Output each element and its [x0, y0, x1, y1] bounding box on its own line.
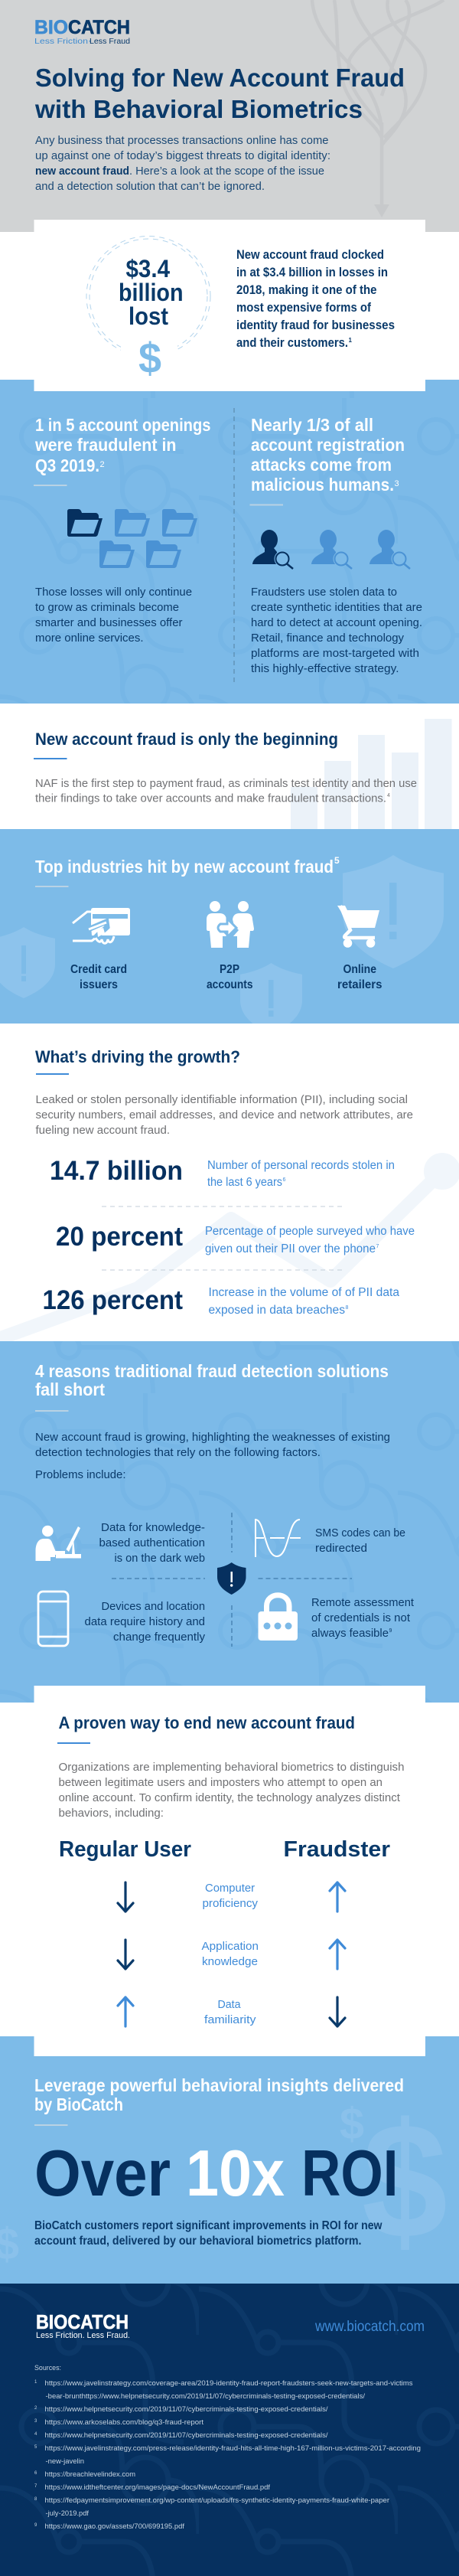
body text: hard to detect at account opening.	[251, 616, 422, 629]
card text: most expensive forms of	[236, 300, 371, 315]
logo: BioCatch white: BIOCATCH	[36, 2310, 129, 2333]
intro text: Any business that processes transactions online has come	[35, 134, 329, 147]
card text: in at $3.4 billion in losses in	[236, 265, 388, 279]
heading	[251, 415, 405, 495]
heading: Q3 2019.	[35, 455, 99, 475]
labels: P2P	[220, 963, 239, 976]
stat: 20 percent: 7	[376, 1244, 379, 1249]
icon: shopping cart	[337, 906, 379, 948]
stat: 126 percent	[43, 1285, 399, 1317]
big ROI statement	[34, 2137, 398, 2210]
text: knowledge-based: based authentication	[99, 1536, 205, 1549]
icon: phone	[38, 1592, 68, 1646]
icon: dollar sign: $	[138, 334, 161, 382]
section: top industries	[0, 829, 459, 1034]
logo: BioCatch white: Less Friction. Less Fraud.	[36, 2331, 130, 2340]
sources: -new-javelin	[46, 2457, 84, 2466]
text: remote assessment	[311, 1596, 415, 1640]
arrows: fraudster	[330, 1882, 345, 2026]
big stat: lost	[129, 302, 168, 330]
labels: retailers	[337, 978, 382, 991]
sources: https://breachlevelindex.com	[44, 2470, 135, 2479]
intro text: and a detection solution that can’t be ignored.	[35, 180, 265, 193]
card text: identity fraud for businesses	[236, 318, 395, 332]
body text: Retail, finance and technology	[251, 632, 404, 645]
website: www.biocatch.com	[314, 2319, 425, 2335]
heading: Leverage powerful behavioral insights delivered	[34, 2075, 404, 2095]
arrows: regular user	[118, 1882, 133, 2026]
heading: malicious humans.	[251, 475, 394, 495]
body text: this highly-effective strategy.	[251, 662, 399, 675]
big ROI statement: 10x	[186, 2137, 285, 2210]
card text	[236, 247, 395, 350]
heading: What’s driving the growth?	[35, 1047, 240, 1066]
vertical dashed divider	[233, 408, 235, 686]
panel: leverage insights	[34, 2075, 404, 2248]
body text: behaviors, including:	[58, 1807, 164, 1820]
dividers	[112, 1513, 352, 1647]
section: 4 reasons	[0, 1341, 459, 1703]
intro text: new account fraud	[35, 165, 129, 178]
stat: 20 percent: given out their PII over the phone	[205, 1242, 376, 1255]
icons: folders	[67, 509, 197, 568]
big stat	[119, 255, 184, 330]
body text: Fraudsters use stolen data to	[251, 586, 397, 599]
behaviour labels: familiarity	[204, 2013, 256, 2026]
icon: person with magnifier 3	[369, 530, 410, 569]
section: white band behind proven way	[0, 1703, 459, 2036]
body text	[34, 2219, 382, 2248]
section: blue leverage background: $	[340, 2099, 364, 2149]
text: remote assessment: Remote assessment	[311, 1596, 415, 1609]
sources: 4	[34, 2432, 37, 2437]
text: SMS codes: SMS codes can be	[315, 1526, 405, 1539]
title	[34, 64, 405, 123]
big ROI statement: Over	[34, 2137, 171, 2210]
heading: 4 reasons traditional fraud detection solutions	[35, 1361, 389, 1381]
intro text: up against one of today’s biggest threats to digital identity:	[35, 149, 330, 162]
body text: create synthetic identities that are	[251, 601, 422, 614]
behaviour labels	[202, 1882, 259, 2026]
text: devices and location: data require history and	[84, 1615, 205, 1628]
title: with Behavioral Biometrics	[34, 95, 363, 123]
icon: credit card in hand	[73, 908, 130, 943]
heading: account registration	[251, 435, 405, 455]
heading: Nearly 1/3 of all	[251, 415, 373, 435]
body text: 4	[387, 793, 390, 798]
stat: 14.7 billion: 14.7 billion	[50, 1156, 183, 1186]
stat: 14.7 billion	[50, 1156, 395, 1189]
icon: person with magnifier 2	[311, 530, 352, 569]
icon: person at computer	[35, 1526, 81, 1561]
text: remote assessment: of credentials is not	[311, 1611, 411, 1624]
body text: platforms are most-targeted with	[251, 647, 419, 660]
stat: 126 percent: exposed in data breaches	[208, 1304, 345, 1317]
icon: padlock	[259, 1595, 298, 1641]
sources: 3	[34, 2419, 37, 2424]
decorative shields	[0, 855, 444, 1034]
panel: proven way to end new account fraud	[34, 1686, 425, 2056]
stat: 20 percent: 20 percent	[56, 1222, 183, 1252]
body text: between legitimate users and imposters who attempt to open an	[58, 1776, 382, 1789]
intro text	[35, 134, 330, 193]
heading	[34, 415, 211, 475]
title: Solving for New Account Fraud	[35, 64, 405, 92]
big stat: $3.4	[125, 255, 170, 282]
column heading: regular user: Regular User	[59, 1837, 191, 1862]
heading: New account fraud is only the beginning	[35, 730, 338, 749]
sources: 7	[34, 2484, 37, 2489]
text: devices and location: Devices and location	[101, 1600, 205, 1613]
stat: 14.7 billion: the last 6 years	[207, 1176, 282, 1189]
text: devices and location	[84, 1600, 205, 1644]
panel: nearly 1/3 of attacks	[249, 415, 422, 675]
heading: attacks come from	[251, 455, 392, 475]
body text: Organizations are implementing behavioral biometrics to distinguish	[58, 1761, 404, 1774]
text: knowledge-based: Data for knowledge-	[101, 1521, 205, 1534]
body text: more online services.	[35, 632, 144, 645]
labels: Online	[343, 963, 376, 976]
stat: 126 percent: 8	[346, 1305, 349, 1311]
card text: New account fraud clocked	[236, 247, 384, 262]
heading: 3	[395, 479, 399, 488]
section: what's driving the growth	[0, 1024, 459, 1341]
sources	[34, 2364, 421, 2531]
heading: A proven way to end new account fraud	[58, 1713, 355, 1732]
background bar chart	[291, 719, 451, 829]
section: footer	[0, 2284, 459, 2576]
dashed circle	[86, 236, 210, 361]
section: blue statistics background	[0, 380, 459, 704]
sources: -bear-brunthttps://www.helpnetsecurity.com/2019/11/07/cybercriminals-testing-exposed-credentials/	[46, 2392, 365, 2401]
stat: 14.7 billion: Number of personal records stolen in	[207, 1159, 395, 1172]
body text	[35, 1093, 413, 1137]
stat: 126 percent: Increase in the volume of of PII data	[208, 1286, 399, 1299]
labels: accounts	[207, 978, 253, 991]
behaviour labels: Application	[202, 1940, 259, 1953]
section: blue leverage background	[0, 2036, 459, 2284]
stat: 20 percent	[56, 1222, 415, 1255]
text: SMS codes: redirected	[315, 1542, 367, 1555]
body text: Problems include:	[35, 1468, 125, 1481]
sources: https://www.idtheftcenter.org/images/page-docs/NewAccountFraud.pdf	[44, 2483, 270, 2492]
icon: person to person	[207, 901, 254, 948]
logo: BioCatch: CATCH	[68, 17, 130, 38]
labels	[70, 963, 382, 991]
body text: fueling new account fraud.	[35, 1124, 170, 1137]
icon: wave	[256, 1519, 301, 1557]
panel: $3.4 billion card	[34, 220, 425, 391]
body text	[35, 777, 417, 805]
sources: Sources:	[34, 2364, 61, 2372]
labels: issuers	[80, 978, 118, 991]
body text: online account. To confirm identity, the technology analyzes distinct	[58, 1791, 401, 1804]
sources: https://www.helpnetsecurity.com/2019/11/07/cybercriminals-testing-exposed-credentials/	[44, 2431, 328, 2440]
body text: New account fraud is growing, highlighting the weaknesses of existing	[35, 1431, 390, 1444]
labels: Credit card	[70, 963, 127, 976]
logo: BioCatch: Less Fraud	[90, 37, 130, 46]
body text: to grow as criminals become	[35, 601, 179, 614]
sources: 5	[34, 2445, 37, 2450]
background trend line	[0, 1161, 453, 1341]
intro text: . Here’s a look at the scope of the issue	[129, 165, 324, 178]
body text	[251, 586, 422, 675]
body text: account fraud, delivered by our behavioral biometrics platform.	[34, 2235, 361, 2248]
stat: 14.7 billion: 6	[283, 1177, 286, 1183]
sources: https://fedpaymentsimprovement.org/wp-content/uploads/frs-synthetic-identity-payments-fraud-white-paper	[44, 2496, 389, 2505]
heading: 2	[99, 460, 105, 469]
card text: 1	[349, 337, 352, 344]
sources: 8	[34, 2497, 37, 2502]
behaviour labels: knowledge	[202, 1955, 258, 1968]
column heading: fraudster: Fraudster	[283, 1837, 390, 1862]
text: remote assessment: always feasible	[311, 1627, 389, 1640]
heading: Top industries hit by new account fraud	[35, 857, 334, 877]
logo: BioCatch	[34, 17, 130, 46]
sources: https://www.helpnetsecurity.com/2019/11/07/cybercriminals-testing-exposed-credentials/	[44, 2405, 328, 2414]
sources: https://www.javelinstrategy.com/coverage-area/2019-identity-fraud-report-fraudsters-seek-new-targets-and-victims	[44, 2379, 413, 2388]
section: blue leverage background: $	[362, 2088, 448, 2273]
text: devices and location: change frequently	[113, 1631, 205, 1644]
panel: leverage insights: by BioCatch	[34, 2094, 123, 2114]
big ROI statement: ROI	[301, 2137, 398, 2210]
sources: 6	[34, 2471, 37, 2476]
card text: 2018, making it one of the	[236, 282, 376, 297]
icon: person with magnifier 1	[252, 530, 293, 569]
body text: Those losses will only continue	[35, 586, 192, 599]
body text	[58, 1761, 404, 1820]
heading: 1 in 5 account openings	[35, 415, 211, 435]
card text: and their customers.	[236, 335, 348, 350]
text: knowledge-based	[99, 1521, 205, 1565]
logo: BioCatch: ·	[89, 37, 92, 46]
stat: 126 percent: 126 percent	[43, 1285, 183, 1315]
sources: https://www.javelinstrategy.com/press-release/identity-fraud-hits-all-time-high-167-million-us-victims-2017-according	[44, 2444, 421, 2453]
panel: 1 in 5 account openings	[34, 415, 211, 645]
logo: BioCatch: BIO	[34, 17, 68, 38]
sources: 9	[34, 2523, 37, 2528]
text: SMS codes	[315, 1526, 405, 1555]
body text: smarter and businesses offer	[35, 616, 183, 629]
section: header background	[0, 0, 459, 232]
body text: their findings to take over accounts and make fraudulent transactions.	[35, 792, 386, 805]
body text: security numbers, email addresses, and device and network attributes, are	[35, 1108, 413, 1121]
body text: detection technologies that rely on the following factors.	[35, 1446, 321, 1459]
behaviour labels: proficiency	[202, 1897, 258, 1910]
sources: https://www.arkoselabs.com/blog/q3-fraud-report	[44, 2418, 203, 2427]
sources: -july-2019.pdf	[46, 2509, 89, 2518]
section: 4 reasons: fall short	[35, 1379, 105, 1399]
body text: Leaked or stolen personally identifiable information (PII), including social	[35, 1093, 408, 1106]
sources: https://www.gao.gov/assets/700/699195.pdf	[44, 2522, 184, 2531]
body text: NAF is the first step to payment fraud, as criminals test identity and then use	[35, 777, 417, 790]
body text: BioCatch customers report significant improvements in ROI for new	[34, 2219, 382, 2232]
heading: were fraudulent in	[34, 435, 177, 455]
logo: BioCatch: Less Friction	[34, 37, 88, 46]
icon: alert shield	[217, 1562, 246, 1595]
body text	[35, 586, 192, 645]
section: white band under header	[0, 232, 459, 380]
body text	[35, 1431, 390, 1481]
sources: 1	[34, 2380, 37, 2385]
stat: 20 percent: Percentage of people surveyed who have	[205, 1225, 415, 1238]
sources: 2	[34, 2406, 37, 2411]
section: top industries: 5	[334, 855, 340, 866]
section: new account fraud is only the beginning	[0, 704, 459, 829]
big stat: billion	[119, 279, 184, 306]
behaviour labels: Data	[217, 1998, 241, 2011]
text: remote assessment: 9	[389, 1628, 392, 1634]
text: knowledge-based: is on the dark web	[115, 1552, 205, 1565]
behaviour labels: Computer	[205, 1882, 255, 1895]
